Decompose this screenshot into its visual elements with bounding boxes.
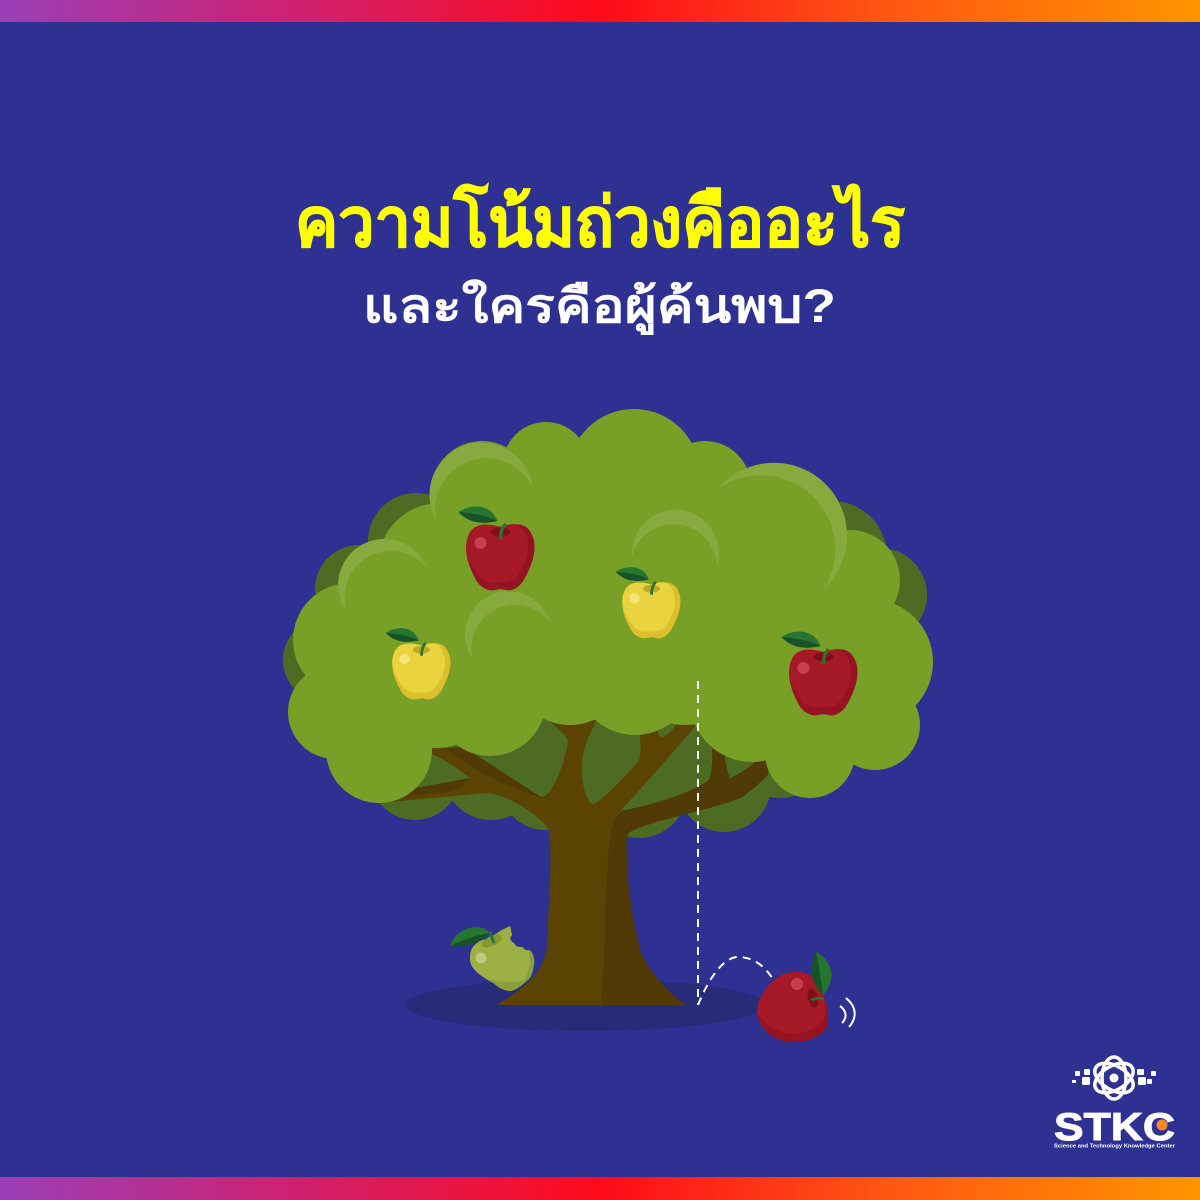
canopy front layer <box>288 409 933 803</box>
apple: red top left <box>458 507 535 590</box>
apple: red right <box>782 632 858 715</box>
tree <box>283 409 933 1005</box>
logo dots <box>1072 1069 1156 1085</box>
logo orange dot <box>1156 1120 1168 1130</box>
subtitle: และใครคือผู้ค้นพบ? <box>363 278 836 336</box>
dashed fall line <box>697 681 699 1005</box>
canopy back layer <box>283 493 927 838</box>
impact sound arcs <box>840 998 855 1027</box>
trunk and branches <box>390 717 770 1005</box>
ground shadow <box>405 979 765 1031</box>
apple: fallen red <box>757 952 831 1042</box>
top gradient bar <box>0 0 1200 22</box>
apple: yellow left <box>386 628 450 699</box>
canopy highlights <box>338 443 847 660</box>
logo wordmark: STKC <box>1054 1106 1175 1149</box>
apple: bitten green <box>450 926 534 991</box>
logo atom icon <box>1090 1057 1138 1099</box>
apple: yellow centre <box>616 567 680 638</box>
title: ความโน้มถ่วงคืออะไร <box>295 183 905 261</box>
logo: STKC <box>1054 1057 1176 1150</box>
dashed bounce arc <box>698 957 774 1005</box>
bottom gradient bar <box>0 1177 1200 1200</box>
logo tagline: Science and Technology Knowledge Center <box>1054 1144 1176 1150</box>
